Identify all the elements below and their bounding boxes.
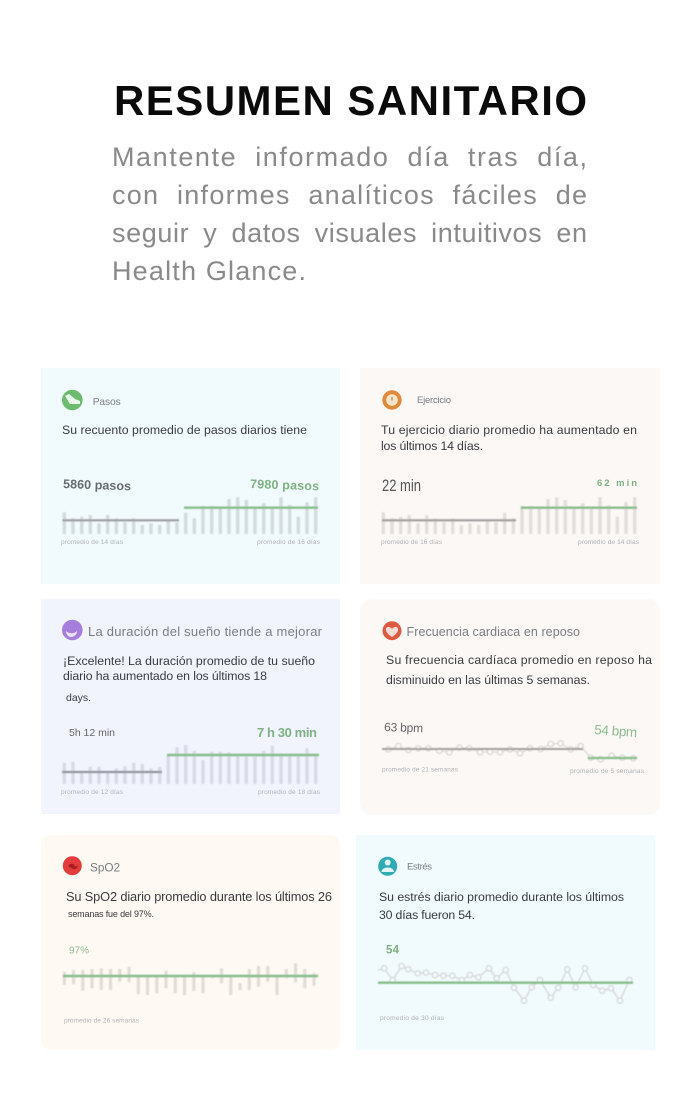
icon: shoe (62, 390, 83, 410)
value: 63 bpm: 63 bpm (384, 720, 423, 735)
description: Su frecuencia cardíaca promedio en reposo ha (386, 653, 652, 667)
description: los últimos 14 días. (381, 439, 483, 453)
panel: frecuencia cardíaca (360, 599, 660, 815)
value: 14-day average: 5860 pasos (63, 477, 131, 493)
subtitle text block (112, 142, 587, 286)
value: 16-day average: 7980 pasos (250, 477, 319, 493)
value: 97%: 97% (69, 946, 89, 957)
value: 54: 54 (386, 945, 400, 957)
icon: heart (382, 621, 402, 640)
description: diario ha aumentado en los últimos 18 (63, 669, 267, 683)
panel: pasos (41, 368, 340, 584)
value: 54 bpm: 54 bpm (594, 722, 638, 740)
bar chart (62, 745, 319, 784)
heading: frecuencia cardíaca: Frecuencia cardiaca en reposo (406, 625, 580, 639)
value: 7 h 30 min: 7 h 30 min (257, 725, 317, 740)
label: 16 days: promedio de 16 días (257, 539, 321, 546)
heading: estrés: Estrés (407, 862, 432, 873)
description (381, 423, 637, 453)
label: 5 weeks: promedio de 5 semanas (570, 768, 645, 775)
panel: sueño (41, 599, 340, 814)
icon: blood cell (63, 856, 82, 875)
label: 16 days: promedio de 16 días (381, 539, 443, 546)
line chart (382, 741, 637, 762)
panel: ejercicio (360, 368, 660, 584)
bar chart (62, 497, 318, 534)
label: 30 days: promedio de 30 días (380, 1015, 445, 1022)
label: 18 days: promedio de 18 días (258, 789, 321, 796)
subtitle text block: con informes analíticos fáciles de (112, 180, 587, 210)
label: 26 weeks: promedio de 26 semanas (64, 1018, 140, 1025)
icon: moon (62, 620, 83, 640)
description: days. (66, 692, 91, 704)
description: Tu ejercicio diario promedio ha aumentado en (381, 423, 637, 437)
panel: spo2 (41, 835, 340, 1050)
subtitle text block: Mantente informado día tras día, (112, 142, 587, 172)
subtitle text block: Health Glance. (112, 256, 306, 286)
icon: stopwatch (382, 390, 402, 410)
label: 21 weeks: promedio de 21 semanas (382, 767, 459, 774)
description (66, 889, 332, 919)
heading: pasos: Pasos (93, 397, 121, 408)
value: 5h 12 min: 5h 12 min (69, 727, 115, 739)
description (63, 654, 315, 704)
value: 22 min: 22 min (382, 476, 421, 495)
panel: estrés (356, 835, 655, 1050)
description: Su SpO2 diario promedio durante los últimos 26 (66, 889, 332, 904)
description: semanas fue del 97%. (68, 909, 154, 919)
description: Su estrés diario promedio durante los últimos (379, 890, 624, 904)
subtitle text block: seguir y datos visuales intuitivos en (112, 218, 587, 248)
label: 14 days: promedio de 14 días (61, 539, 124, 546)
heading: ejercicio: Ejercicio (417, 395, 451, 406)
heading: spo2: SpO2 (90, 861, 120, 875)
bar chart (382, 497, 637, 534)
title: RESUMEN SANITARIO (114, 77, 587, 124)
line chart (378, 963, 633, 1003)
description: disminuido en las últimas 5 semanas. (386, 673, 590, 687)
label: 14 days: promedio de 14 días (578, 539, 640, 546)
description: ¡Excelente! La duración promedio de tu sueño (63, 654, 315, 668)
value: 62 min: 62 min (597, 478, 637, 489)
description: Su recuento promedio de pasos diarios tiene (62, 423, 307, 437)
label: 12 days: promedio de 12 días (61, 789, 124, 796)
description: 30 días fueron 54. (379, 908, 475, 922)
icon: person (378, 857, 397, 876)
bar chart (63, 963, 318, 995)
description (379, 890, 624, 922)
description (386, 653, 652, 687)
heading: sueño: La duración del sueño tiende a mejorar (88, 624, 323, 639)
